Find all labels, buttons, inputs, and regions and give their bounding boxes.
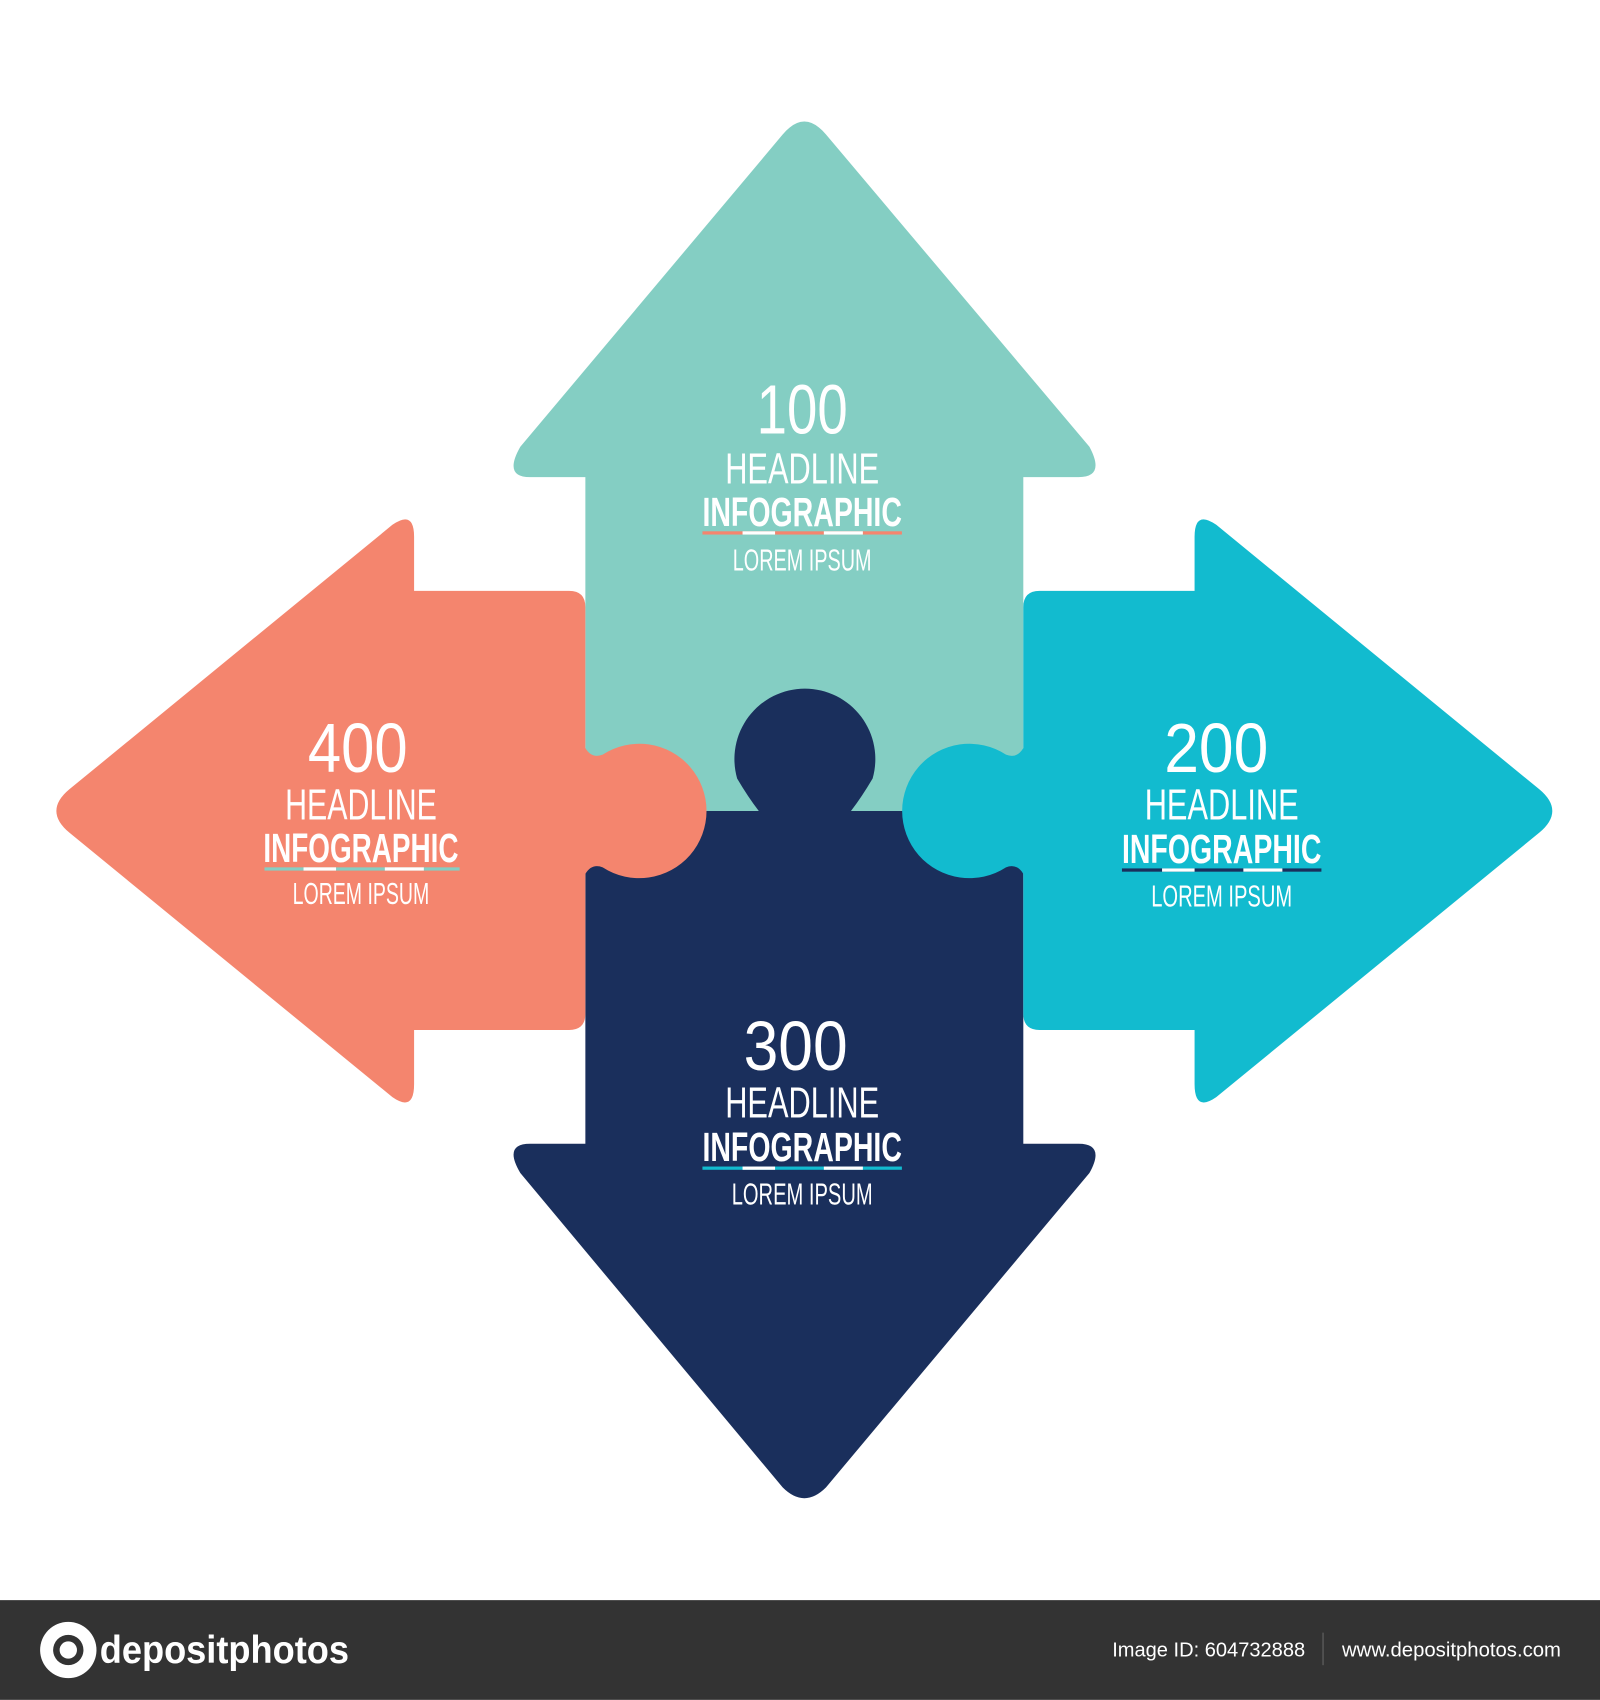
text block: 300: INFOGRAPHIC — [702, 1124, 902, 1170]
arrow: orange left (400) — [56, 519, 707, 1102]
text block: 400: HEADLINE — [285, 782, 437, 830]
text block: 300 — [702, 1007, 902, 1211]
arrow: blue right (200) — [902, 519, 1552, 1102]
text block: 400: INFOGRAPHIC — [263, 825, 459, 871]
text block: 400: 400 — [308, 709, 408, 787]
text block: 400 — [263, 709, 460, 911]
text block: 200: LOREM IPSUM — [1151, 880, 1292, 913]
text block: 100 — [702, 371, 902, 577]
footer image id: Image ID: 604732888 — [1112, 1639, 1305, 1662]
footer bar — [0, 1600, 1600, 1700]
arrow: teal up (100) — [514, 122, 1096, 811]
icon: camera logo — [40, 1622, 96, 1678]
text block: 200 — [1122, 709, 1321, 913]
footer url: www.depositphotos.com — [1341, 1639, 1561, 1662]
text block: 300: LOREM IPSUM — [732, 1178, 873, 1211]
text block: 200: 200 — [1164, 709, 1268, 787]
footer logo text: depositphotos — [100, 1629, 349, 1672]
text block: 300: HEADLINE — [725, 1080, 879, 1128]
text block: 100: LOREM IPSUM — [733, 544, 872, 577]
text block: 100: INFOGRAPHIC — [702, 489, 902, 535]
text block: 100: HEADLINE — [725, 446, 879, 494]
text block: 100: 100 — [757, 371, 848, 449]
text block: 200: INFOGRAPHIC — [1122, 826, 1321, 872]
arrow: navy down (300) — [514, 689, 1096, 1498]
text block: 300: 300 — [744, 1007, 848, 1085]
text block: 400: LOREM IPSUM — [293, 878, 429, 911]
text block: 200: HEADLINE — [1145, 782, 1299, 830]
